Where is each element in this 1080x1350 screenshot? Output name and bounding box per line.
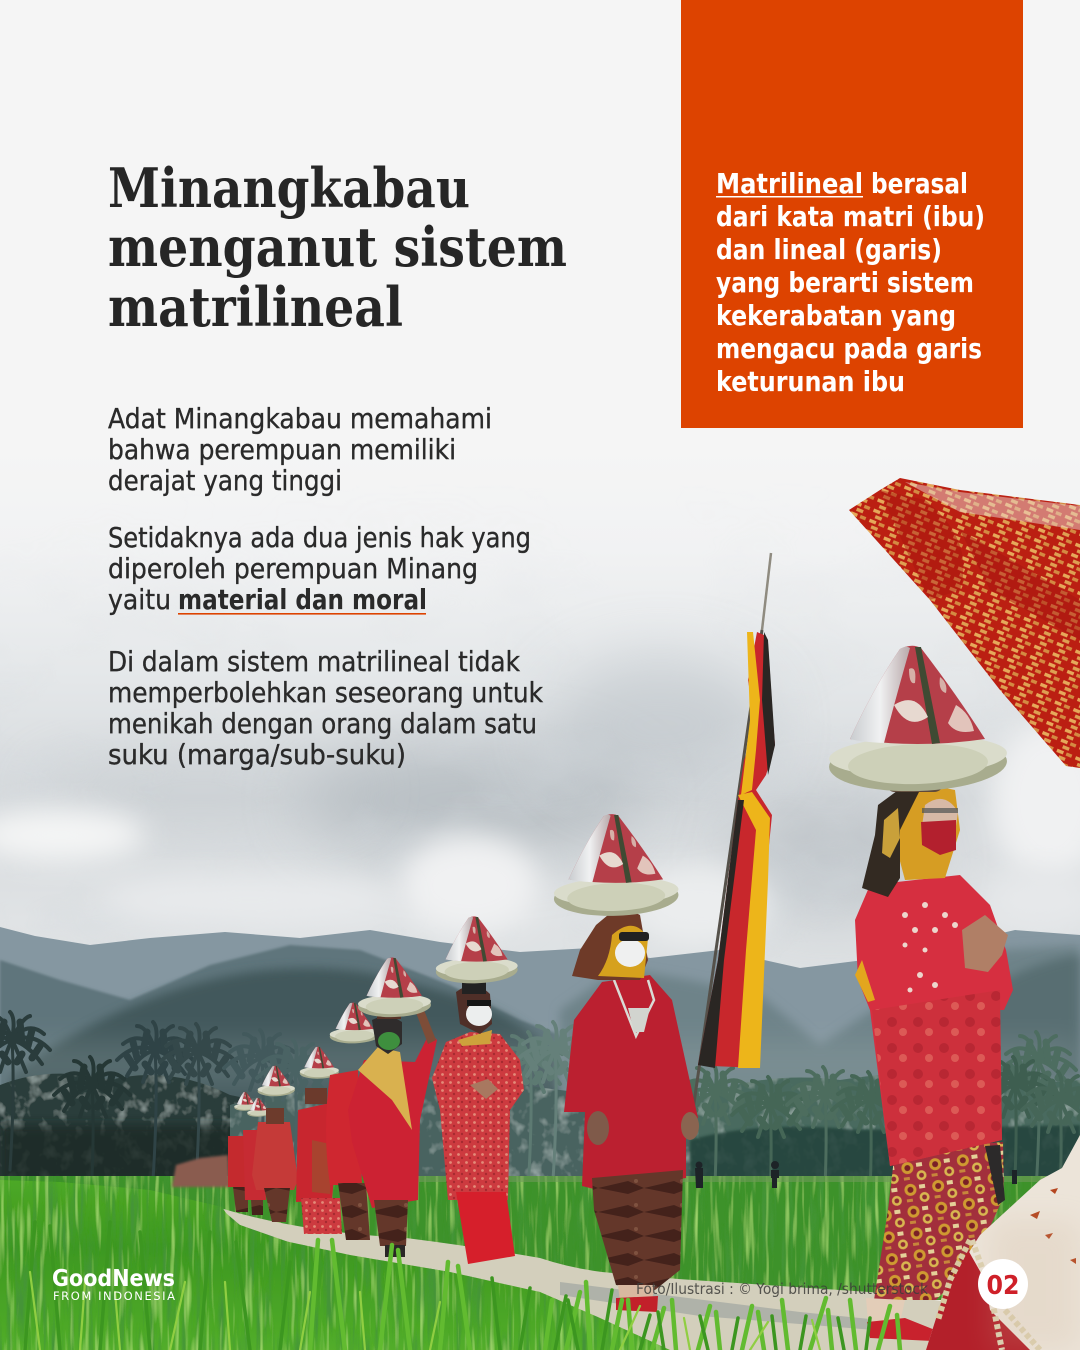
logo: GoodNews from Indonesia: FROM INDONESIA: [53, 1289, 175, 1303]
title: matrilineal: [108, 275, 403, 339]
page number badge: 02: [986, 1271, 1020, 1301]
paragraph 1: [108, 402, 492, 497]
panel text: berasal: [871, 168, 968, 200]
orange definition panel: [681, 0, 1023, 428]
flag on pole: [693, 553, 775, 1110]
photo credit: Foto/Ilustrasi : © Yogi brima, /shutterstock: [636, 1280, 928, 1298]
page number badge: [978, 1259, 1028, 1309]
panel text: kekerabatan yang: [716, 300, 956, 332]
marcher 7: [252, 1066, 298, 1222]
scarf and face: [895, 785, 960, 880]
panel text: keturunan ibu: [716, 366, 905, 398]
panel text: mengacu pada garis: [716, 333, 982, 365]
rice field behind the path: [0, 1176, 1080, 1300]
title: Minangkabau: [108, 156, 470, 220]
background: misty mountains: [0, 927, 1080, 1200]
crowd in the distance: [172, 1155, 230, 1187]
paragraph 1: Adat Minangkabau memahami: [108, 402, 492, 435]
paragraph 2: yaitu: [108, 583, 171, 616]
logo: GoodNews from Indonesia: GoodNews: [52, 1266, 175, 1292]
panel text: yang berarti sistem: [716, 267, 974, 299]
distant people in the field: [695, 1161, 1017, 1188]
foreground grass blades: [25, 1222, 900, 1350]
paragraph 3: [108, 645, 544, 771]
marcher 8: [243, 1098, 270, 1215]
paragraph 2: [108, 521, 531, 616]
marcher 9: [228, 1092, 257, 1212]
fabric corner top right: [849, 478, 1080, 768]
paragraph 3: menikah dengan orang dalam satu: [108, 707, 537, 740]
paragraph 3: suku (marga/sub-suku): [108, 738, 406, 771]
marcher 5: [326, 1003, 380, 1240]
paragraph 2: diperoleh perempuan Minang: [108, 552, 478, 585]
marcher 4 with raised arm: [348, 957, 437, 1257]
marcher 3 in patterned kebaya: [432, 916, 524, 1264]
panel text: dari kata matri (ibu): [716, 201, 985, 233]
background: sky with clouds: [0, 566, 1080, 968]
logo: GoodNews from Indonesia: [52, 1266, 175, 1303]
paragraph 2: Setidaknya ada dua jenis hak yang: [108, 521, 531, 554]
paragraph 1: bahwa perempuan memiliki: [108, 433, 456, 466]
paragraph 3: memperbolehkan seseorang untuk: [108, 676, 544, 709]
paragraph 1: derajat yang tinggi: [108, 464, 342, 497]
title: menganut sistem: [108, 215, 567, 279]
marcher 2 in dark red: [553, 814, 699, 1312]
paragraph 3: Di dalam sistem matrilineal tidak: [108, 645, 521, 678]
title: [108, 156, 567, 339]
marcher 6: [296, 1047, 342, 1234]
foreground rice grass: [0, 1180, 670, 1350]
kebaya top: [855, 875, 1013, 1166]
panel text: [716, 168, 985, 398]
panel text: dan lineal (garis): [716, 234, 942, 266]
tree line with palm trees: [0, 1012, 1080, 1235]
concrete path: [220, 1208, 1080, 1350]
line of small marchers and crowd: [172, 916, 524, 1264]
panel text: Matrilineal: [716, 168, 863, 200]
marcher 1 in the foreground with embroidered kebaya: [828, 646, 1013, 1341]
fabric corner bottom right: [926, 1135, 1080, 1350]
paragraph 2: material dan moral: [178, 583, 427, 616]
